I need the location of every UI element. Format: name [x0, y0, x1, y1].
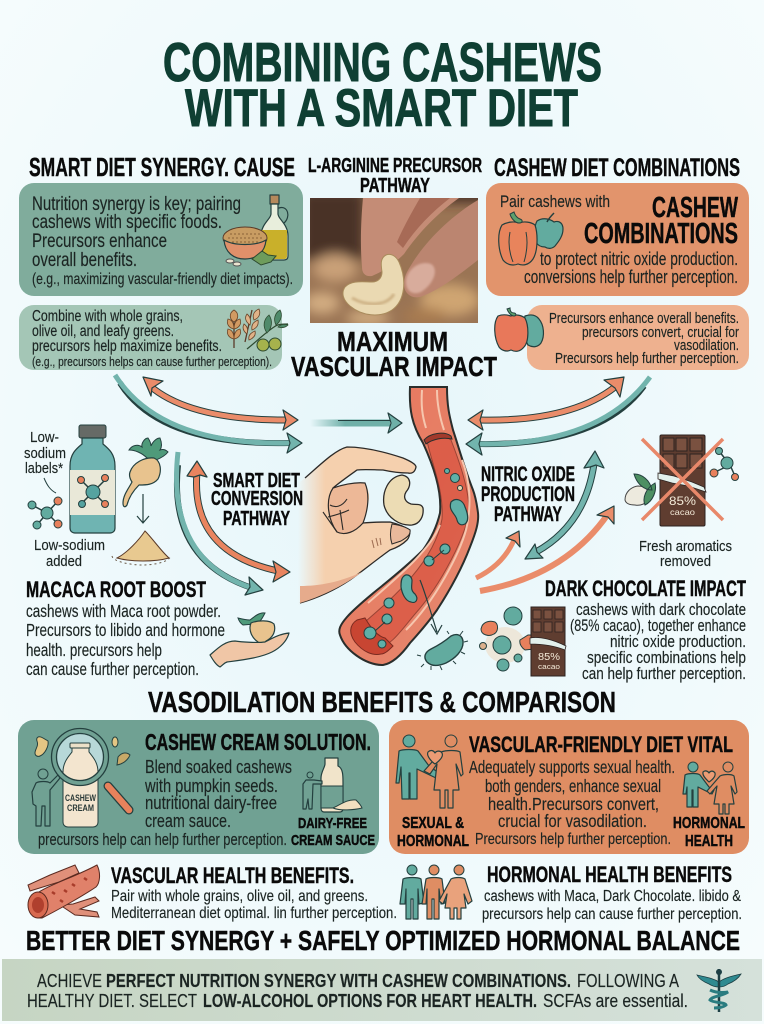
illustration: blood vessel [339, 387, 478, 665]
heading: L-arginine precursor pathway: L-ARGININE PRECURSOR [308, 155, 482, 177]
text: footer message [27, 971, 688, 1011]
text: fresh aromatics removed: removed [660, 553, 711, 570]
text: macaca body: Precursors to libido and hormone [26, 620, 225, 640]
text: macaca body: health. precursors help [26, 640, 162, 660]
text: footer message: ACHIEVE [37, 971, 102, 991]
text: vascular health body [111, 888, 397, 922]
heading: L-arginine precursor pathway [308, 155, 482, 197]
panel: precursors [495, 305, 749, 370]
label: smart diet conversion pathway [211, 470, 303, 530]
text: synergy body: cashews with specific foods. [32, 212, 222, 233]
text: dark chocolate body [570, 600, 746, 683]
icon: caduceus [697, 969, 741, 1012]
text: low-sodium added: added [46, 553, 82, 570]
text: cashew cream body: precursors help can help further perception. [38, 830, 287, 849]
section: hormonal health benefits [482, 862, 742, 923]
text: vascular-friendly body: health.Precursors convert, [488, 794, 659, 814]
arrow: orange two-way upper right [468, 377, 624, 430]
title [163, 31, 602, 138]
text: footer message: LOW-ALCOHOL OPTIONS FOR HEART HEALTH. [203, 991, 537, 1011]
text: fresh aromatics removed: Fresh aromatics [639, 538, 732, 555]
photo: fingers holding a cashew [310, 198, 478, 323]
text: cashew cream body: cream sauce. [145, 811, 231, 831]
icon: chocolate bar with nutrient bubbles: 85% [538, 652, 560, 663]
label: sexual and hormonal [397, 815, 469, 850]
text: footer message: FOLLOWING A [577, 971, 679, 991]
text: cashew cream body [38, 757, 292, 849]
arrow: teal curved lower left [177, 452, 263, 595]
footer band [2, 959, 762, 1021]
icon: magnifier over cashew cream bottle [32, 728, 130, 827]
text: low-sodium labels [24, 429, 66, 477]
arrow: teal two-way right [525, 451, 604, 559]
text: macaca body [26, 601, 225, 679]
arrow: orange long right [480, 506, 614, 591]
heading: maximum vascular impact: VASCULAR IMPACT [291, 351, 497, 382]
icon: garlic and leaves [625, 474, 656, 505]
arrow: orange two-way lower left [187, 461, 290, 582]
panel: synergy [19, 183, 303, 296]
icon: chocolate bar with nutrient bubbles [480, 607, 566, 676]
text: synergy body: (e.g., maximizing vascular-friendly diet impacts). [32, 271, 293, 288]
icon: wheat and olives [227, 309, 288, 351]
panel: cashew cream solution [18, 720, 379, 854]
text: combine foods body [32, 308, 272, 369]
heading: macaca root boost: MACACA ROOT BOOST [26, 577, 206, 602]
icon: magnifier over cashew cream bottle: CREAM [67, 803, 94, 813]
arrow: teal straight to vessel [310, 413, 402, 433]
icon: maca root [123, 438, 168, 523]
label: sexual and hormonal: SEXUAL & [402, 815, 464, 832]
text: synergy body: Nutrition synergy is key; pairing [32, 194, 241, 215]
icon: vessel cross-section [28, 865, 100, 918]
title: COMBINING CASHEWS [163, 31, 602, 93]
label: nitric oxide production pathway: PRODUCTION [481, 483, 575, 506]
icon: maca powder pile [112, 531, 171, 565]
illustration: hand holding cashew [296, 447, 423, 606]
heading: maximum vascular impact [291, 326, 497, 382]
section: macaca root boost [26, 577, 225, 679]
text: combine foods body: olive oil, and leafy greens. [32, 323, 174, 340]
text: fresh aromatics removed [639, 538, 732, 570]
icon: cashew nut [384, 475, 423, 525]
label: nitric oxide production pathway: PATHWAY [494, 503, 562, 526]
icon: magnifier over cashew cream bottle: CASHEW [65, 793, 96, 803]
text: macaca body: can cause further perception. [26, 659, 199, 679]
heading: smart diet synergy: SMART DIET SYNERGY. CAUSE [29, 152, 295, 182]
text: cashew cream body: Blend soaked cashews [145, 757, 292, 777]
heading: cashew cream solution: CASHEW CREAM SOLUTION. [145, 729, 371, 755]
icon: three people [400, 865, 472, 919]
arrow: teal upper left [115, 375, 302, 453]
label: smart diet conversion pathway: PATHWAY [223, 508, 290, 530]
text: nitric oxide protection [524, 249, 738, 287]
text: footer message: SCFAs are essential. [543, 991, 688, 1011]
label: hormonal health [673, 815, 745, 850]
icon: peppers [495, 308, 543, 351]
panel: vascular-friendly diet vital [389, 720, 749, 854]
arrow: orange two-way upper left [143, 377, 298, 430]
label: sexual and hormonal: HORMONAL [397, 833, 469, 850]
label: nitric oxide production pathway [481, 463, 575, 526]
icon: crossed-out dark chocolate [642, 435, 723, 526]
text: cashew cream body: nutritional dairy-free [145, 793, 277, 813]
text: low-sodium added [34, 537, 105, 570]
label: smart diet conversion pathway: SMART DIET [213, 470, 300, 492]
icon: molecule [28, 478, 62, 529]
text: combine foods body: Combine with whole grains, [32, 308, 183, 325]
text: vascular health body: Pair with whole grains, olive oil, and greens. [111, 888, 368, 905]
icon: crossed-out dark chocolate: 85% [669, 494, 696, 508]
text: vascular-friendly body: both genders, enhance sexual [485, 776, 661, 796]
label: hormonal health: HEALTH [685, 833, 733, 850]
title: WITH A SMART DIET [185, 79, 578, 138]
heading: vascular health benefits: VASCULAR HEALTH BENEFITS. [111, 863, 354, 888]
text: synergy body [32, 194, 293, 288]
heading: L-arginine precursor pathway: PATHWAY [360, 175, 430, 197]
label: dairy-free cream sauce [291, 815, 375, 849]
text: vascular-friendly body: Adequately supports sexual health. [469, 757, 675, 777]
icon: small bottle and cream [303, 758, 362, 812]
text: footer message: HEALTHY DIET. SELECT [27, 991, 197, 1011]
heading: vasodilation benefits and comparison: VASODILATION BENEFITS & COMPARISON [148, 687, 616, 719]
icon: couple right [683, 762, 737, 814]
icon: low-sodium bottle with label [70, 425, 115, 533]
label: dairy-free cream sauce: DAIRY-FREE [298, 815, 367, 832]
arrow: orange short right [476, 531, 520, 578]
icon: bacterium [417, 631, 468, 670]
text: low-sodium labels: labels* [25, 460, 63, 477]
icon: bell peppers [499, 212, 563, 265]
arrow: teal upper right [466, 377, 650, 455]
text: pair cashews: Pair cashews with [500, 192, 610, 211]
text: synergy body: overall benefits. [32, 250, 137, 271]
heading: cashew combinations [584, 192, 738, 250]
text: footer message: PERFECT NUTRITION SYNERGY WITH CASHEW COMBINATIONS. [106, 971, 571, 991]
label: smart diet conversion pathway: CONVERSION [211, 488, 303, 510]
text: precursors body: vasodilation. [674, 337, 739, 354]
label: dairy-free cream sauce: CREAM SAUCE [291, 832, 375, 849]
label: nitric oxide production pathway: NITRIC OXIDE [481, 463, 575, 486]
icon: crossed-out dark chocolate: cacao [670, 507, 695, 517]
text: hormonal health body [482, 888, 742, 923]
icon: olive oil and grain bowl [223, 195, 288, 266]
panel: combine foods [19, 305, 288, 370]
icon: chocolate bar with nutrient bubbles: cacao [538, 664, 560, 671]
text: synergy body: Precursors enhance [32, 231, 167, 252]
section: vascular health benefits [111, 863, 397, 922]
heading: maximum vascular impact: MAXIMUM [337, 326, 448, 357]
text: low-sodium labels: Low- [30, 429, 59, 446]
text: cashew cream body: with pumpkin seeds. [144, 776, 278, 796]
icon: molecule right [710, 448, 738, 480]
text: macaca body: cashews with Maca root powder. [26, 601, 221, 621]
icon: couple left [396, 735, 463, 808]
text: combine foods body: (e.g., precursors helps can cause further perception). [32, 355, 272, 369]
text: precursors body [549, 310, 739, 367]
panel: cashew combinations [486, 183, 749, 296]
text: low-sodium labels: sodium [24, 445, 66, 462]
text: low-sodium added: Low-sodium [34, 537, 105, 554]
icon: hand holding maca [210, 613, 289, 667]
text: vascular health body: Mediterranean diet optimal. lin further perception. [111, 905, 397, 922]
text: vascular-friendly body: Precursors help further perception. [475, 831, 671, 848]
section: dark chocolate impact [545, 576, 746, 683]
text: vascular-friendly body: crucial for vasodilation. [498, 811, 647, 831]
text: vascular-friendly body [469, 757, 675, 848]
text: combine foods body: precursors help maximize benefits. [32, 338, 222, 355]
